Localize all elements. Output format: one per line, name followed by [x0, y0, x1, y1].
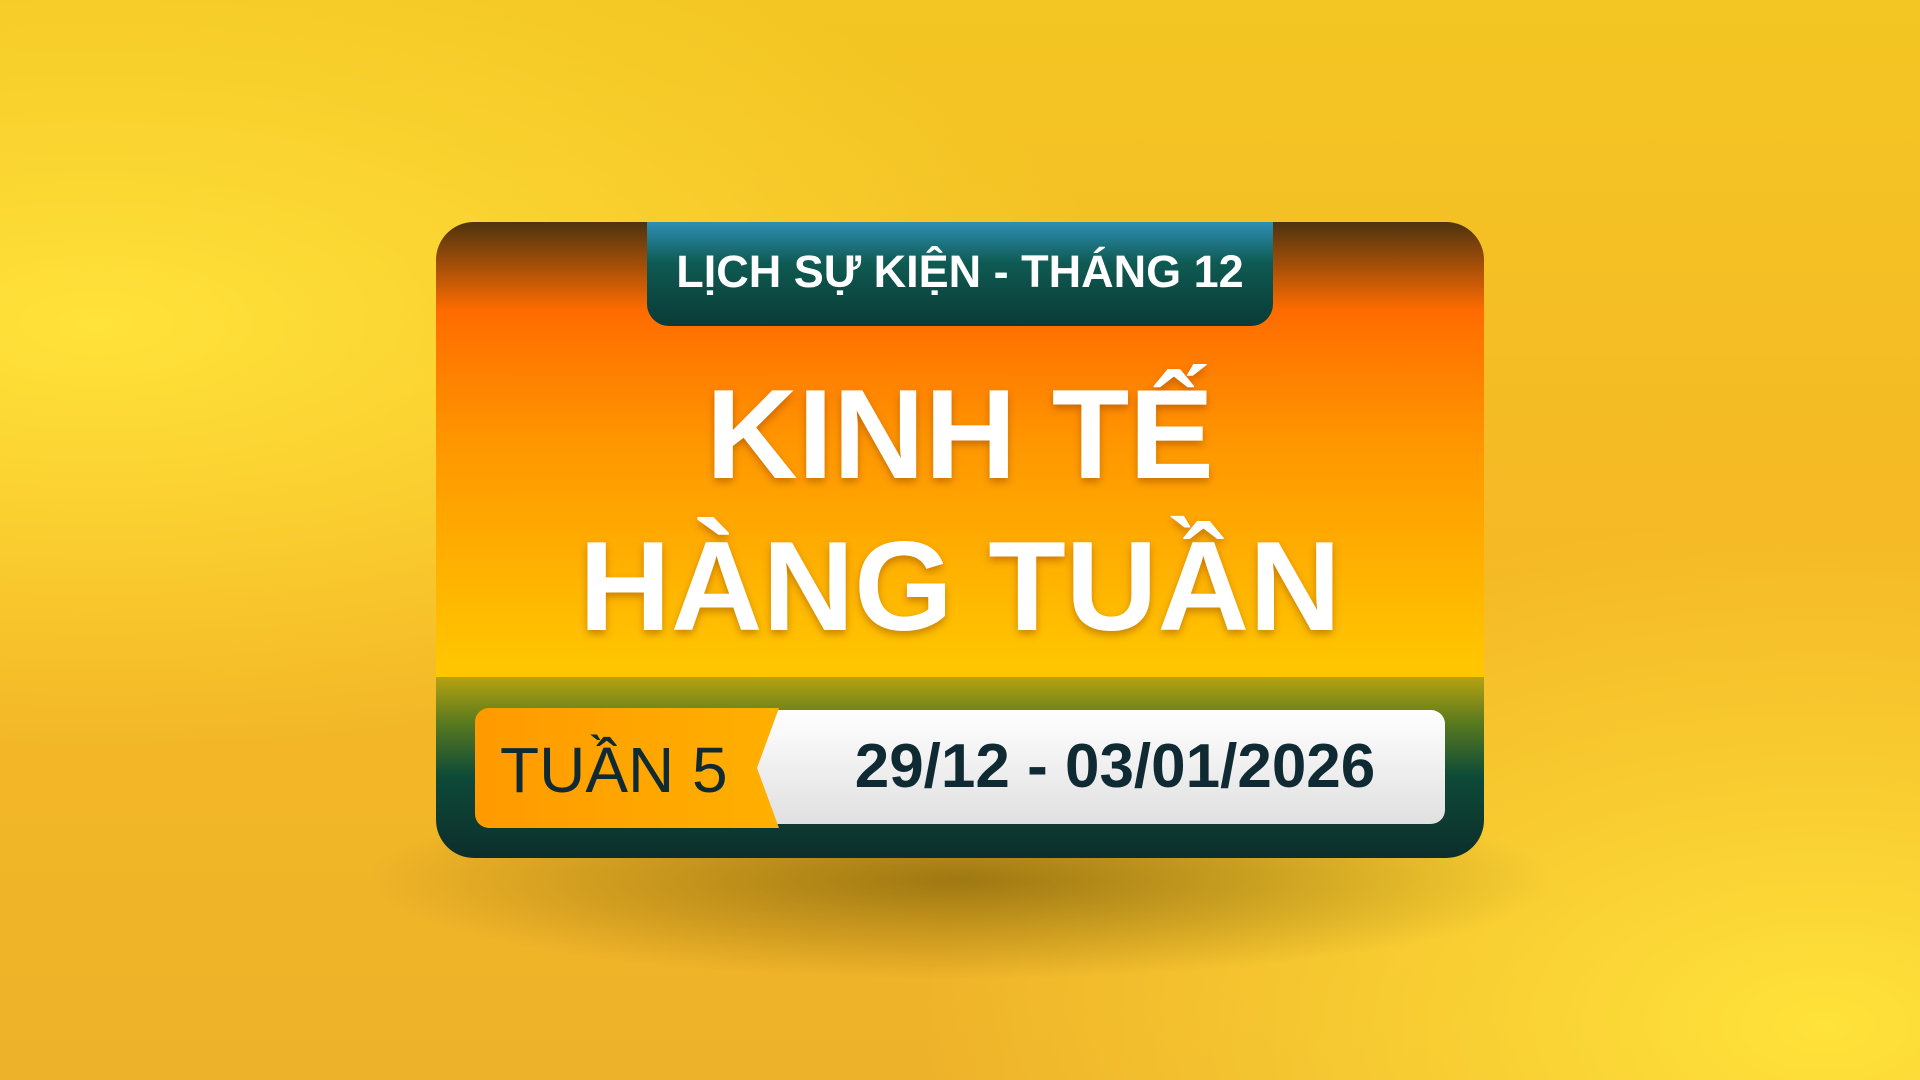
bottom band — [436, 677, 1484, 858]
tab: month label: LỊCH SỰ KIỆN - THÁNG 12 — [676, 246, 1244, 297]
title line 2: HÀNG TUẦN — [579, 515, 1341, 657]
tab: month label — [647, 222, 1273, 326]
card — [436, 222, 1484, 858]
date box: 29/12 - 03/01/2026 — [855, 732, 1375, 801]
date box — [755, 710, 1445, 824]
title line 1: KINH TẾ — [706, 363, 1214, 505]
week label: TUẦN 5 — [500, 734, 728, 806]
week label — [475, 708, 779, 828]
date strip — [475, 708, 1445, 828]
